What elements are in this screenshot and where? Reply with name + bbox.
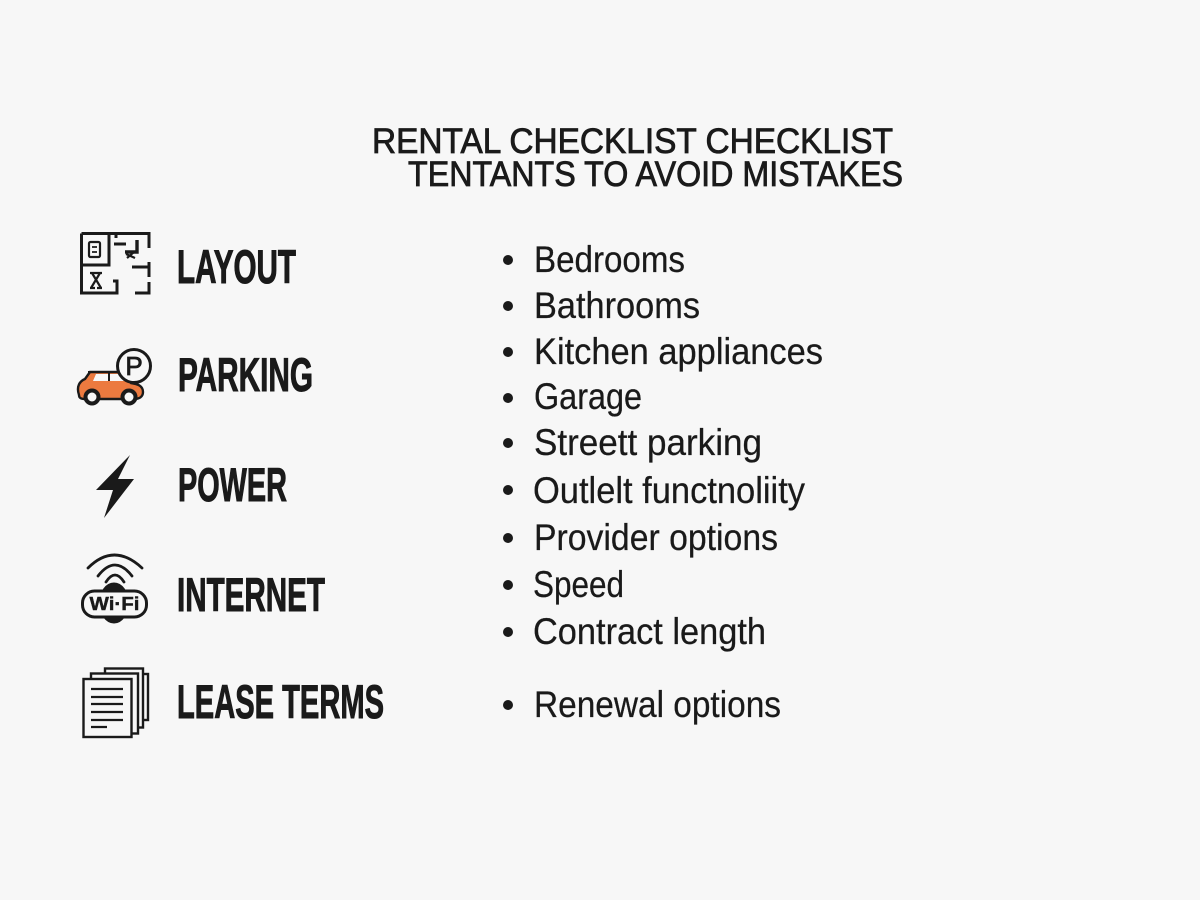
title (372, 122, 903, 194)
checklist items: Contract length (533, 611, 766, 652)
checklist items: Provider options (534, 517, 778, 558)
icon: wifi (82, 555, 146, 624)
checklist items: Garage (534, 376, 642, 417)
checklist items: Renewal options (534, 684, 781, 725)
title: RENTAL CHECKLIST CHECKLIST (372, 122, 893, 161)
title: TENTANTS TO AVOID MISTAKES (408, 155, 903, 194)
checklist items: Bedrooms (534, 239, 685, 280)
icon: car with parking sign: P (125, 351, 143, 381)
icon: wifi: Wi·Fi (90, 594, 140, 614)
checklist items: Streett parking (534, 422, 762, 463)
icon: lightning bolt (96, 455, 134, 518)
checklist items: Speed (533, 564, 624, 605)
checklist items: Bathrooms (534, 285, 700, 326)
checklist items: Kitchen appliances (534, 331, 823, 372)
icon: floor plan (82, 234, 149, 293)
heading: lease terms: LEASE TERMS (177, 675, 384, 728)
icon: stacked documents (84, 668, 148, 737)
heading: internet: INTERNET (177, 568, 325, 621)
checklist items: Outlelt functnoliity (533, 470, 805, 511)
checklist items (503, 239, 823, 725)
heading: parking: PARKING (178, 348, 313, 401)
icon: car with parking sign (78, 350, 150, 404)
heading: power: POWER (178, 458, 287, 511)
heading: layout: LAYOUT (177, 240, 296, 293)
